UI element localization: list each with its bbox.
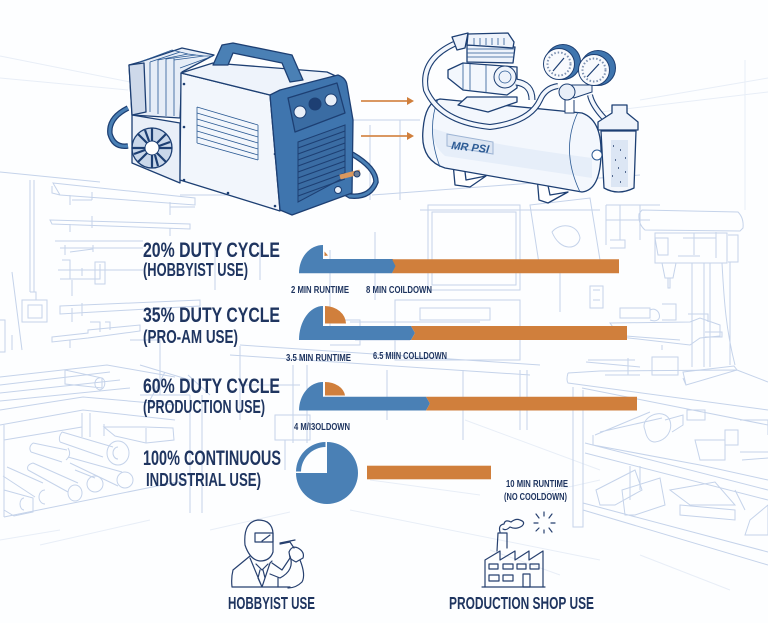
fitting	[340, 172, 360, 177]
knobs	[294, 106, 306, 118]
hoses	[425, 44, 558, 127]
blue front	[270, 75, 353, 215]
pump fins	[467, 45, 515, 63]
pump head	[467, 33, 514, 48]
logo badge: MR PSI	[451, 140, 491, 156]
front grille	[298, 125, 345, 202]
runtime label: 10 MIN RUNTIME	[506, 478, 568, 490]
centre bench	[230, 345, 540, 443]
arrow: lower	[361, 132, 414, 140]
vent louvers	[197, 107, 258, 160]
row: 60% duty cycle	[143, 374, 637, 433]
subheading: INDUSTRIAL USE)	[146, 470, 261, 490]
cooldown label: 6.5 MIIN COLLDOWN	[373, 350, 447, 362]
no cooldown label: (NO COOLDOWN)	[504, 491, 567, 503]
label: hobbyist use: HOBBYIST USE	[228, 593, 315, 613]
pie and bar	[299, 382, 637, 410]
illustration: air compressor	[423, 33, 638, 203]
fan	[132, 115, 180, 183]
cooldown label: 8 MIN COILDOWN	[366, 284, 432, 296]
arrow: upper	[361, 97, 414, 105]
runtime label: 2 MIN RUNTIME	[291, 284, 349, 296]
overlapping label: 4 M/I3OLDOWN	[294, 421, 350, 433]
pie and bar	[299, 245, 619, 273]
subheading: (HOBBYIST USE)	[143, 260, 248, 280]
tank	[423, 99, 601, 192]
subheading: (PRODUCTION USE)	[143, 397, 265, 417]
pie and bar	[299, 306, 627, 340]
pie	[296, 442, 358, 504]
heat sink	[129, 48, 214, 118]
label: production shop use: PRODUCTION SHOP USE	[449, 593, 594, 613]
wall and rear bench lines	[0, 120, 640, 292]
welder hoses	[110, 108, 128, 146]
right bench	[567, 370, 768, 527]
heading: 20% DUTY CYCLE	[143, 238, 280, 262]
heading: 100% CONTINUOUS	[143, 446, 281, 470]
pump motor	[448, 63, 517, 95]
icon: factory	[482, 512, 555, 587]
row: 20% duty cycle	[143, 238, 619, 296]
gauges	[544, 44, 616, 113]
tank feet	[453, 163, 486, 187]
left tool racks	[52, 183, 195, 215]
pump base	[458, 97, 517, 112]
icon: hobbyist welder	[232, 520, 304, 588]
side panel	[180, 73, 280, 211]
row: 35% duty cycle	[143, 303, 627, 364]
bar	[367, 466, 491, 479]
row: 100% continuous	[143, 442, 568, 504]
filter bowl	[598, 105, 638, 192]
handle	[213, 43, 303, 82]
arrows from welder to compressor	[361, 97, 414, 140]
subheading: (PRO-AM USE)	[143, 327, 238, 347]
illustration: welder machine	[110, 43, 376, 215]
drill press	[639, 210, 743, 231]
heading: 60% DUTY CYCLE	[143, 374, 280, 398]
runtime label: 3.5 MIN RUNTIME	[286, 352, 351, 364]
sparks	[534, 512, 555, 533]
logo badge	[447, 134, 493, 156]
left bench and stock	[0, 365, 175, 425]
heading: 35% DUTY CYCLE	[143, 303, 280, 327]
